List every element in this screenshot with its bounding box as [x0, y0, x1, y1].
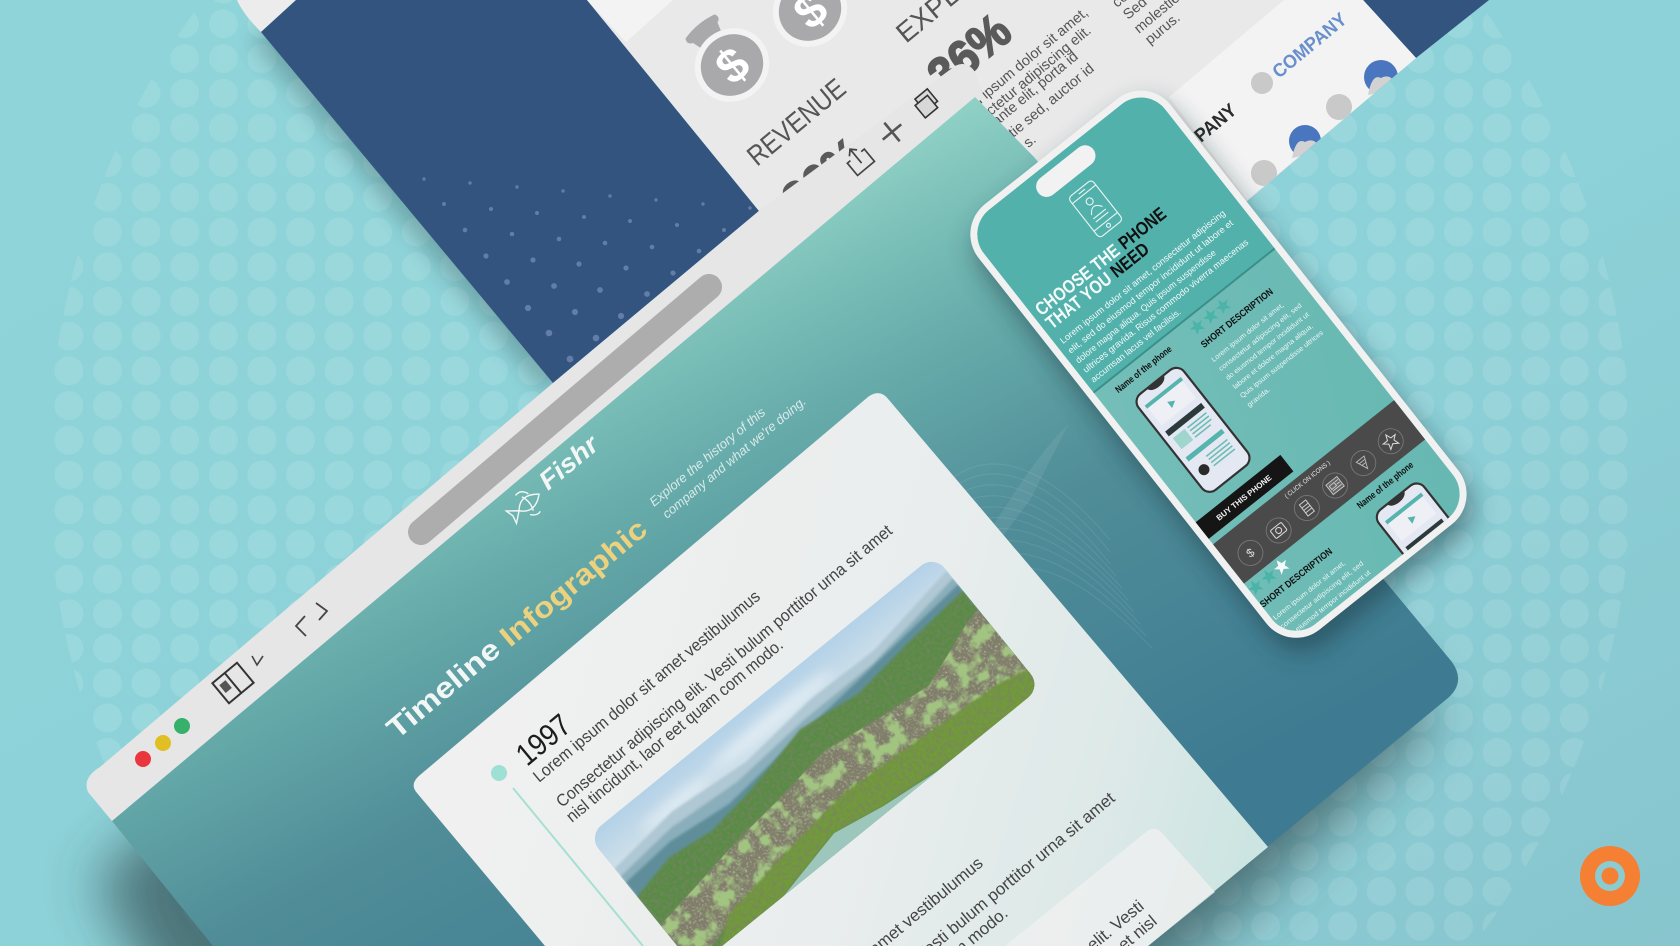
water: [784, 771, 938, 896]
icon: forward arrow: [316, 603, 327, 620]
icon: money bag revenue: $: [706, 37, 760, 95]
icon: money bag revenue: [669, 0, 784, 117]
report body text: Lorem ipsum dolor sit amet,: [944, 5, 1092, 131]
sky: [594, 562, 953, 876]
panel: back window report page: [587, 0, 1416, 211]
hill texture: [638, 592, 976, 946]
short description text two: Lorem ipsum dolor sit amet,: [1272, 560, 1347, 622]
browser chrome: [86, 64, 984, 821]
window control green: [174, 718, 190, 734]
timeline text first entry: nisl tincidunt, laor eet quam com modo.: [562, 635, 787, 826]
wave mesh decoration: [950, 425, 1152, 648]
heading that you need: THAT YOU NEED: [1041, 238, 1153, 333]
panel: phone: [963, 87, 1486, 660]
product name two: Name of the phone: [1355, 460, 1416, 511]
phone notch: [1032, 141, 1100, 201]
report body text: molestie sed, auctor id: [976, 61, 1098, 166]
short description text one: labore et dolore magna aliqua.: [1232, 323, 1315, 391]
report header strip: [587, 0, 673, 42]
icon: share: [842, 142, 874, 175]
icon: copy: [912, 89, 941, 118]
value expenses: 36%: [918, 4, 1021, 102]
short description text two: consectetur adipiscing elit, sed: [1279, 560, 1365, 631]
year 1997: 1997: [509, 707, 578, 772]
short description text one: Lorem ipsum dolor sit amet,: [1211, 302, 1286, 364]
shoreline trees: [720, 669, 1034, 946]
far mountains: [614, 572, 958, 892]
avatar blue one: [1289, 125, 1322, 158]
icon: sidebar toggle: [212, 663, 254, 703]
panel: back window navy page: [237, 0, 759, 383]
panel: main browser window: [86, 64, 1458, 946]
icon: plus: [875, 115, 909, 149]
short description text one: do eiusmod tempor incididunt ut: [1225, 311, 1311, 382]
intro paragraph: Lorem ipsum dolor sit amet, consectetur adipiscing: [1058, 208, 1227, 346]
tagline: Explore the history of this: [646, 404, 769, 509]
shoreline texture: [721, 672, 1034, 946]
icon: fish logo: [502, 483, 548, 528]
browser drop shadow: [94, 155, 1434, 946]
icon: pin: [1356, 456, 1372, 472]
phone shadow: [961, 89, 1487, 667]
buy button: BUY THIS PHONE: [1215, 473, 1274, 523]
report second column text: [1109, 0, 1185, 48]
window control red: [135, 751, 151, 767]
back window chrome corner: [237, 0, 296, 32]
short description text two: [1272, 551, 1372, 640]
town dark texture: [632, 609, 1042, 946]
screen header background: [963, 84, 1275, 393]
report page body: [587, 0, 1416, 385]
address bar: [421, 287, 709, 532]
click on icons label: ( CLICK ON ICONS ): [1284, 460, 1332, 500]
short description text one: Quis ipsum suspendisse ultrices: [1239, 329, 1325, 400]
value revenue: 36%: [773, 128, 876, 226]
near mountains: [612, 585, 1041, 946]
short description text one: gravida.: [1246, 387, 1272, 409]
second image card: [1005, 829, 1215, 946]
illustration: phone one: [1133, 364, 1254, 496]
avatar blue two: [1364, 60, 1398, 95]
short description heading two: SHORT DESCRIPTION: [1258, 546, 1335, 610]
report body text: Fusce ante elit, porta id: [956, 49, 1082, 157]
short description text two: do eiusmod tempor incididunt ut: [1286, 569, 1372, 640]
intro paragraph: accumsan lacus vel facilisis.: [1089, 307, 1183, 385]
rating stars one: [1190, 300, 1231, 335]
header divider: [1092, 247, 1276, 394]
label revenue: REVENUE: [741, 72, 852, 172]
short description heading one: SHORT DESCRIPTION: [1199, 286, 1276, 351]
window control yellow: [155, 735, 171, 751]
photo: landscape: [588, 555, 1043, 946]
buy button: [1195, 455, 1293, 539]
short description text one: [1211, 302, 1324, 408]
navy dot grid: [422, 177, 752, 362]
town: [660, 610, 1028, 946]
back page shadow: [253, 10, 751, 393]
brand name: Fishr: [533, 428, 606, 496]
icon: document: [1299, 500, 1314, 516]
title timeline: Timeline: [381, 633, 507, 745]
intro paragraph: dolore magna aliqua. Quis ipsum suspendisse: [1074, 248, 1218, 365]
logo badge: [1580, 846, 1640, 906]
company labels and avatars: [1191, 9, 1398, 186]
icon: dollar: $: [1243, 545, 1258, 561]
screen lower background: [963, 84, 1474, 645]
phone body: [955, 75, 1482, 653]
intro paragraph: elit, sed do eiusmod tempor incididunt ut labore et: [1066, 218, 1235, 355]
timeline text first entry: Lorem ipsum dolor sit amet vestibulumus: [529, 587, 764, 786]
company section: [1169, 0, 1416, 200]
product name one: Name of the phone: [1113, 344, 1174, 396]
rating stars two: [1245, 555, 1292, 597]
timeline line: [513, 788, 643, 946]
icon: newspaper: [1326, 476, 1344, 495]
tagline: company and what we're doing.: [659, 393, 809, 521]
title infographic: Infographic: [494, 513, 654, 653]
report body text: s.: [1021, 132, 1040, 151]
timeline text first entry: Consectetur adipiscing elit. Vesti bulum porttitor urna sit amet: [552, 521, 896, 811]
green hill: [617, 591, 1041, 946]
icon: star outline: [1380, 430, 1401, 451]
icon: sidebar chevron: [252, 656, 263, 665]
illustration: phone two: [1373, 479, 1494, 612]
report body text: consectetur adipiscing elit.: [954, 23, 1095, 144]
clouds: [644, 671, 830, 830]
navy page: [261, 0, 759, 383]
icon: money bag expenses: [758, 0, 862, 62]
report second column text: purus.: [1142, 10, 1184, 48]
town light texture: [662, 610, 1026, 946]
label company black: PANY: [1191, 100, 1241, 147]
icon: camera: [1270, 522, 1287, 539]
timeline card: [414, 393, 1268, 946]
icon rings: [1233, 424, 1408, 571]
town tree patches: [661, 615, 1028, 946]
short description text one: consectetur adipiscing elit, sed: [1218, 302, 1304, 373]
intro paragraph: [1058, 208, 1258, 385]
icon: back arrow: [296, 616, 306, 636]
label company blue: COMPANY: [1269, 9, 1352, 83]
browser content background: [112, 97, 1458, 946]
avatars grey: [1251, 72, 1352, 186]
intro paragraph: ultrices gravida. Risus commodo viverra maecenas: [1081, 237, 1251, 375]
heading choose the phone: CHOOSE THE PHONE: [1031, 203, 1170, 320]
icon strip: [1212, 400, 1426, 584]
icon: phone outline: [1068, 179, 1123, 238]
timeline marker dot: [491, 765, 507, 781]
phone screen: [977, 98, 1460, 631]
navy corner top right: [1363, 0, 1489, 58]
